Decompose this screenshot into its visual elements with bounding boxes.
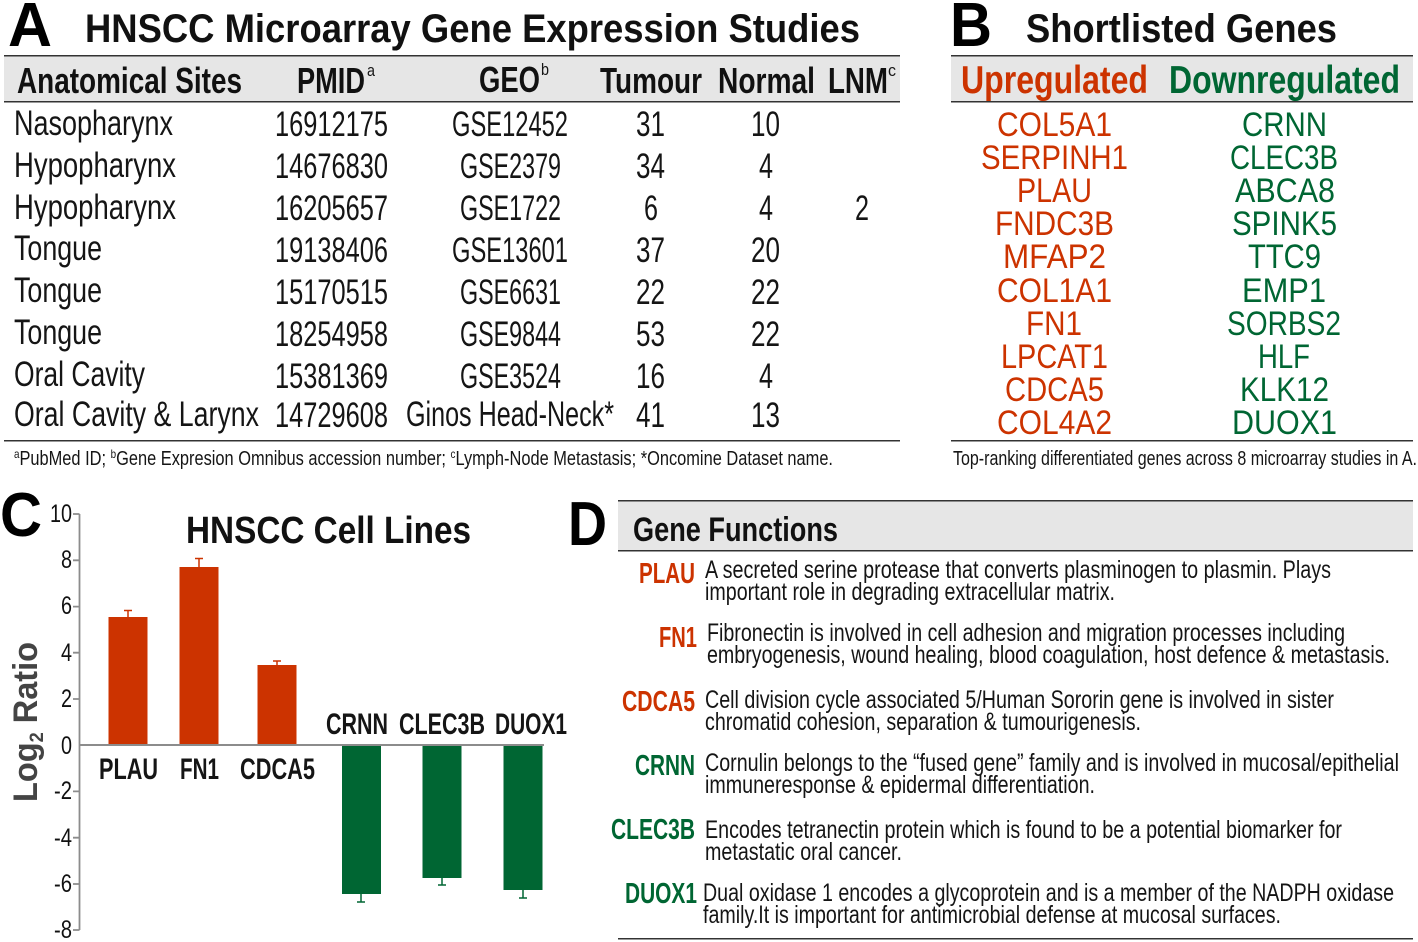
panel letter C: C	[0, 481, 42, 550]
gene functions header band: Gene Functions	[633, 511, 838, 549]
upregulated gene list: COL4A2	[997, 404, 1112, 442]
table rows: GSE12452	[452, 105, 568, 144]
table rows: 41	[636, 396, 665, 435]
bar labels	[99, 708, 567, 786]
function: DUOX1: family.It is important for antimicrobial defense at mucosal surfaces.	[703, 901, 1281, 929]
upregulated gene list: PLAU	[1017, 172, 1092, 210]
table rows: Ginos Head-Neck*	[406, 395, 614, 434]
downregulated gene list: ABCA8	[1235, 172, 1335, 210]
table footnote: Gene Expresion Omnibus accession number;	[116, 448, 451, 470]
bars: downregulated	[342, 745, 542, 902]
y axis with ticks: 4	[61, 639, 72, 667]
table rows: 4	[759, 147, 773, 186]
function: CLEC3B: metastatic oral cancer.	[705, 838, 902, 866]
upregulated gene list: MFAP2	[1003, 238, 1106, 276]
downregulated gene list: CLEC3B	[1230, 139, 1338, 177]
y axis with ticks: 10	[50, 500, 72, 528]
table rows: Tongue	[14, 229, 102, 268]
table rows: 13	[751, 396, 780, 435]
table rows: 14729608	[275, 396, 388, 435]
table rows: 4	[759, 189, 773, 228]
function: PLAU: important role in degrading extracellular matrix.	[705, 578, 1115, 606]
table rows: Tongue	[14, 271, 102, 310]
title: Shortlisted Genes: Shortlisted Genes	[1026, 7, 1337, 51]
table rows: Oral Cavity & Larynx	[14, 395, 259, 434]
y axis with ticks: 8	[61, 546, 72, 574]
table header band: b	[541, 60, 549, 79]
table rows	[14, 104, 869, 435]
table rows: Oral Cavity	[14, 355, 145, 394]
bar labels: FN1	[180, 753, 219, 786]
table rows: Hypopharynx	[14, 146, 176, 185]
table rows: 19138406	[275, 231, 388, 270]
table rows: 22	[636, 273, 665, 312]
downregulated gene list	[1227, 106, 1341, 442]
table rows: 37	[636, 231, 665, 270]
table rows: 20	[751, 231, 780, 270]
table rows: 6	[644, 189, 658, 228]
y axis with ticks: 6	[61, 592, 72, 620]
table footnote: b	[111, 447, 116, 461]
y axis with ticks: 2	[61, 685, 72, 713]
bar labels: CRNN	[326, 708, 388, 741]
table rows: 31	[636, 105, 665, 144]
table rows: GSE13601	[452, 231, 568, 270]
function: CRNN: immuneresponse & epidermal differentiation.	[705, 771, 1095, 799]
upregulated gene list: FNDC3B	[995, 205, 1114, 243]
upregulated gene list	[981, 106, 1128, 442]
table footnote: PubMed ID;	[19, 448, 111, 470]
table rows: 22	[751, 315, 780, 354]
function: CDCA5: chromatid cohesion, separation & tumourigenesis.	[705, 708, 1141, 736]
downregulated gene list: EMP1	[1242, 272, 1326, 310]
table rows: GSE2379	[460, 147, 561, 186]
function: DUOX1	[625, 878, 1394, 929]
table header band	[4, 55, 900, 102]
table header band: Normal	[718, 60, 815, 101]
table rows: 15170515	[275, 273, 388, 312]
bar labels: PLAU	[99, 753, 158, 786]
gene functions header band	[618, 500, 1413, 552]
table rows: 22	[751, 273, 780, 312]
table rows: 53	[636, 315, 665, 354]
table rows: 34	[636, 147, 665, 186]
upregulated gene list: COL5A1	[997, 106, 1112, 144]
table rows: 10	[751, 105, 780, 144]
chart title: HNSCC Cell Lines	[186, 510, 471, 552]
upregulated gene list: FN1	[1026, 305, 1082, 343]
gene list header band: Upregulated	[961, 59, 1148, 102]
function: CDCA5	[622, 686, 1334, 736]
table header band: LNM	[828, 60, 888, 101]
table rows: Nasopharynx	[14, 104, 173, 143]
y axis title: Log2 Ratio: 2	[27, 732, 48, 742]
bars: upregulated	[108, 558, 296, 745]
table rows: 16205657	[275, 189, 388, 228]
table footnote: Lymph-Node Metastasis; *Oncomine Dataset name.	[455, 448, 833, 470]
y axis with ticks: -4	[54, 824, 72, 852]
function: PLAU: PLAU	[639, 558, 695, 590]
function: FN1: FN1	[659, 622, 697, 654]
function: CLEC3B	[611, 814, 1342, 866]
panel C: HNSCC cell lines bar chart	[0, 481, 567, 942]
downregulated gene list: KLK12	[1240, 371, 1329, 409]
panel letter D: D	[568, 490, 607, 559]
y axis title: Log2 Ratio: Log	[7, 740, 45, 802]
table footnote: a	[14, 447, 20, 461]
panel B: shortlisted genes	[950, 0, 1417, 470]
function: DUOX1: DUOX1	[625, 878, 697, 910]
function: CDCA5: CDCA5	[622, 686, 695, 718]
gene list header band	[951, 55, 1413, 102]
table rows: GSE6631	[460, 273, 561, 312]
function: CLEC3B: CLEC3B	[611, 814, 695, 846]
table rows: GSE1722	[460, 189, 561, 228]
function: FN1	[659, 619, 1390, 669]
table rows: 14676830	[275, 147, 388, 186]
y axis with ticks	[50, 500, 80, 942]
table rows: GSE3524	[460, 357, 561, 396]
table rows: GSE9844	[460, 315, 561, 354]
table header band: c	[888, 61, 896, 80]
upregulated gene list: LPCAT1	[1001, 338, 1108, 376]
downregulated gene list: CRNN	[1242, 106, 1327, 144]
table rows: 16912175	[275, 105, 388, 144]
table rows: 4	[759, 357, 773, 396]
bar labels: DUOX1	[495, 708, 567, 741]
table header band: PMID	[297, 60, 365, 101]
upregulated gene list: SERPINH1	[981, 139, 1128, 177]
upregulated gene list: COL1A1	[997, 272, 1112, 310]
panel D: gene functions	[568, 490, 1413, 940]
table rows: 2	[855, 189, 869, 228]
table rows: 15381369	[275, 357, 388, 396]
panel A: microarray studies table	[4, 0, 900, 470]
y axis with ticks: 0	[61, 732, 72, 760]
downregulated gene list: SORBS2	[1227, 305, 1341, 343]
table rows: 16	[636, 357, 665, 396]
table footnote: c	[451, 447, 455, 461]
y axis title: Log2 Ratio: Ratio	[7, 642, 45, 732]
upregulated gene list: CDCA5	[1005, 371, 1104, 409]
function: PLAU	[639, 556, 1331, 606]
downregulated gene list: TTC9	[1248, 238, 1321, 276]
y axis with ticks: -6	[54, 870, 72, 898]
table header band: GEO	[479, 59, 540, 100]
bar labels: CLEC3B	[399, 708, 485, 741]
table rows: 18254958	[275, 315, 388, 354]
zero baseline	[79, 744, 544, 746]
y axis with ticks: -2	[54, 777, 72, 805]
table rows: Hypopharynx	[14, 188, 176, 227]
downregulated gene list: DUOX1	[1232, 404, 1337, 442]
title: HNSCC Microarray Gene Expression Studies: HNSCC Microarray Gene Expression Studies	[85, 7, 860, 51]
table header band: a	[367, 61, 375, 80]
table header band: Tumour	[600, 60, 702, 101]
function: CRNN: CRNN	[635, 750, 695, 782]
bar labels: CDCA5	[240, 753, 315, 786]
downregulated gene list: SPINK5	[1232, 205, 1337, 243]
function: CRNN	[635, 749, 1399, 799]
table header band: Anatomical Sites	[17, 60, 242, 101]
table rows: Tongue	[14, 313, 102, 352]
downregulated gene list: HLF	[1258, 338, 1310, 376]
